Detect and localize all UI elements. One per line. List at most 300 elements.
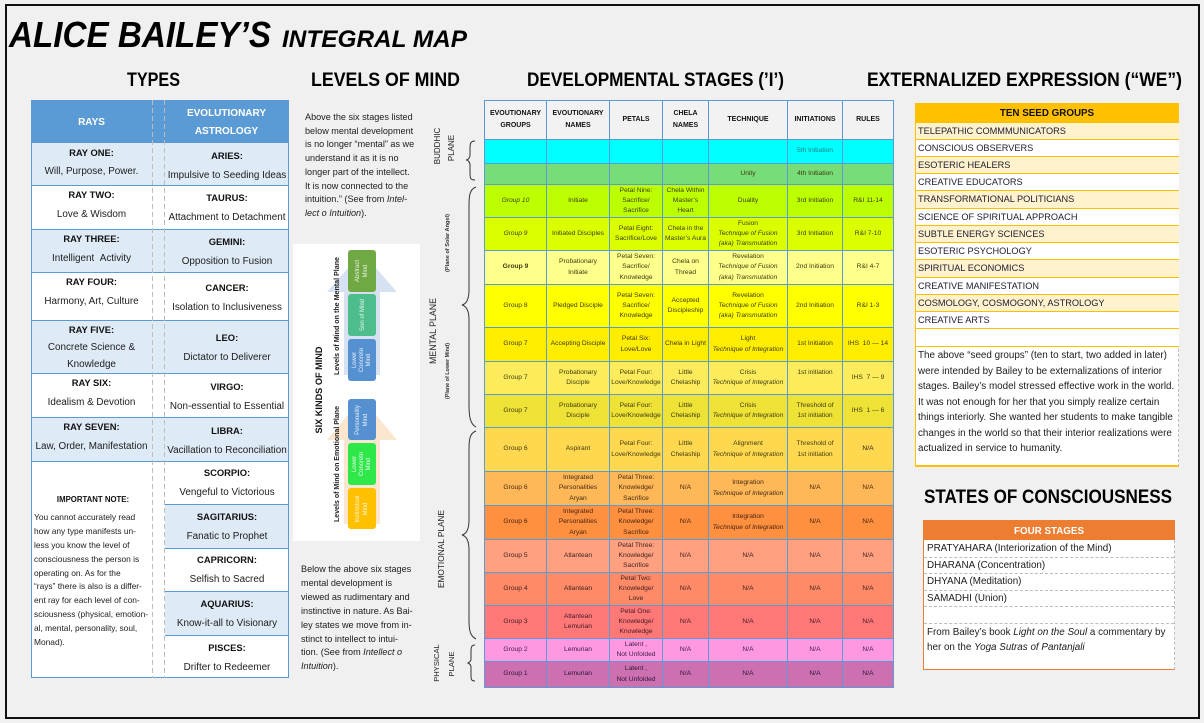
four stages list: PRATYAHARA (Interiorization of the Mind) — [927, 543, 1112, 554]
capricorn: CAPRICORN: — [197, 554, 257, 564]
table: developmental stages: N/A — [862, 484, 874, 491]
table: developmental stages: INITIATIONS — [794, 116, 836, 123]
table: developmental stages: Discipleship — [668, 307, 703, 314]
ray five: Concrete Science & — [48, 342, 135, 353]
text block: above the six stages: It is now connected to the — [305, 181, 408, 191]
table: developmental stages: N/A — [680, 484, 691, 491]
table: developmental stages: R&I 11-14 — [853, 197, 883, 204]
table: developmental stages: RULES — [856, 116, 880, 123]
seed panel background — [915, 103, 1179, 467]
virgo — [170, 381, 284, 412]
table: developmental stages: Duality — [738, 197, 758, 204]
box: lower concrete mind, mental: Mind — [366, 353, 372, 367]
table: developmental stages: 3rd Initiation — [797, 230, 833, 237]
table: developmental stages: Lemurian — [564, 623, 592, 630]
table: developmental stages: Chelaship — [671, 450, 700, 458]
label: buddhic plane — [433, 128, 456, 164]
table: developmental stages: N/A — [680, 518, 691, 525]
table: developmental stages: Not Unfolded — [616, 676, 656, 682]
box: instinctual mind: Mind — [363, 502, 369, 516]
table: developmental stages: Petal Four: — [620, 402, 652, 409]
table: developmental stages: Accepted — [672, 297, 699, 304]
brace: mental plane — [462, 187, 476, 427]
brace: buddhic plane — [466, 141, 475, 180]
table: developmental stages: Chela Within — [667, 187, 704, 194]
diagram: six kinds of mind — [313, 250, 397, 529]
table: developmental stages: NAMES — [565, 122, 591, 129]
table: developmental stages: Technique of Fusion — [718, 302, 778, 309]
box: abstract mind: Abstract — [355, 260, 361, 282]
ray three — [52, 233, 131, 264]
ray six — [48, 377, 135, 408]
table: developmental stages: Chelaship — [671, 412, 700, 419]
table: developmental stages: Petal Nine: — [620, 187, 652, 194]
table: developmental stages: Probationary — [559, 369, 597, 376]
table: developmental stages: Accepting Disciple — [551, 340, 605, 347]
text: CREATIVE MANIFESTATION — [918, 281, 1039, 291]
table: developmental stages: IHS 1 — 6 — [852, 407, 884, 414]
table: developmental stages: Initiate — [568, 197, 588, 204]
ray seven — [36, 421, 147, 452]
table: developmental stages: Petal Three: — [618, 542, 654, 549]
scorpio — [179, 466, 275, 498]
table: developmental stages: Chela on — [672, 258, 699, 265]
text block: above the six stages: lect o Intuition). — [305, 208, 367, 218]
label: levels of mind on the mental plane: Levels of Mind on the Mental Plane — [332, 257, 341, 375]
table: developmental stages: N/A — [809, 585, 821, 592]
important note: how any type manifests un- — [34, 526, 136, 536]
label: physical plane: PLANE — [447, 652, 456, 676]
four stages list: SAMADHI (Union) — [927, 592, 1007, 604]
panel: four stages background — [923, 520, 1175, 670]
ray seven: RAY SEVEN: — [63, 421, 120, 432]
label: emotional plane: EMOTIONAL PLANE — [436, 510, 446, 588]
four stages list: her on the Yoga Sutras of Pantanjali — [927, 642, 1085, 652]
four stages list: From Bailey’s book Light on the Soul a commentary by — [927, 627, 1165, 638]
gemini: Opposition to Fusion — [182, 256, 272, 267]
seed groups header — [915, 103, 1179, 123]
title — [8, 14, 468, 55]
table: developmental stages: (aka) Transmutation — [719, 240, 777, 247]
text block: above the six stages: is no longer “mental” as we — [305, 139, 414, 149]
table: developmental stages: 1st initiation — [797, 412, 833, 419]
table: developmental stages: Sacrifice — [623, 529, 649, 536]
seed groups explanation: It was not enough for her that you simply realize certain — [918, 396, 1159, 408]
table: developmental stages: EVOUTIONARY — [552, 110, 604, 117]
table: developmental stages: Disciple — [566, 379, 590, 386]
table: developmental stages: R&I 4-7 — [857, 263, 879, 270]
cancer — [172, 282, 282, 313]
text block: below the six stages: tion. (See from Intellect o — [301, 647, 402, 657]
seed groups explanation: things interiorly. She wanted her students to make tangible — [918, 412, 1173, 423]
table: developmental stages: Sacrifice/ — [622, 302, 650, 309]
label: levels of mind on emotional plane: Levels of Mind on Emotional Plane — [332, 406, 341, 522]
table: developmental stages: Group 6 — [503, 445, 528, 452]
title: ALICE BAILEY’S — [8, 14, 271, 55]
brace: physical plane — [468, 645, 475, 681]
box: lower concrete mind, emotional — [348, 443, 376, 485]
table: developmental stages: Knowledge/ — [619, 518, 653, 525]
table: developmental stages: PETALS — [622, 116, 650, 123]
table: developmental stages: Technique of Integration — [713, 379, 783, 386]
table: developmental stages: R&I 7-10 — [855, 230, 881, 237]
libra — [167, 425, 287, 456]
heading: externalized expression: EXTERNALIZED EXPRESSION (“WE”) — [867, 70, 1182, 91]
ray four — [44, 276, 139, 306]
heading: states of consciousness: STATES OF CONSCIOUSNESS — [924, 487, 1172, 508]
label: physical plane — [432, 644, 456, 682]
table: developmental stages: NAMES — [673, 122, 698, 129]
ray two: RAY TWO: — [68, 189, 115, 200]
table: developmental stages: N/A — [862, 670, 874, 677]
ray six: Idealism & Devotion — [48, 396, 135, 408]
four stages list: DHARANA (Concentration) — [927, 560, 1045, 570]
table: developmental stages: Personalities — [559, 518, 597, 525]
box: abstract mind — [348, 250, 376, 292]
table: developmental stages: Pledged Disciple — [553, 302, 603, 309]
table: developmental stages: N/A — [809, 670, 821, 677]
text block: below the six stages: Intuition). — [301, 661, 338, 671]
table: developmental stages: Little — [678, 440, 693, 447]
ray five: RAY FIVE: — [69, 324, 114, 335]
table: developmental stages: Sacrifice/ — [622, 197, 650, 204]
gemini: GEMINI: — [209, 236, 245, 247]
table: developmental stages: Love/Love — [621, 346, 651, 352]
table: developmental stages: Disciple — [566, 412, 590, 419]
important note: al, mental, personality, soul, — [34, 623, 137, 633]
table: developmental stages: Latent , — [625, 641, 647, 648]
heading: levels of mind: LEVELS OF MIND — [311, 70, 460, 91]
table: developmental stages: N/A — [809, 618, 821, 625]
box: lower concrete mind, mental: Concrete — [359, 347, 365, 372]
four stages list: DHYANA (Meditation) — [927, 576, 1021, 587]
table: developmental stages: Knowledge/ — [619, 585, 653, 592]
pisces — [184, 642, 270, 672]
text: CREATIVE EDUCATORS — [918, 177, 1023, 187]
ray three: RAY THREE: — [63, 233, 120, 244]
table: developmental stages: Knowledge — [619, 274, 653, 281]
table: developmental stages: Light — [741, 335, 755, 342]
label: physical plane: PHYSICAL — [432, 644, 441, 682]
table: developmental stages: Sacrifice — [623, 495, 649, 502]
table: developmental stages: Petal Seven: — [617, 292, 655, 299]
table: developmental stages: Integration — [732, 513, 764, 520]
table: developmental stages: Atlantean — [564, 585, 592, 592]
table: developmental stages: Technique of Integration — [713, 412, 783, 419]
table: developmental stages: Group 1 — [503, 670, 528, 677]
table: developmental stages: IHS 10 — 14 — [848, 340, 888, 347]
text block: below the six stages — [301, 564, 413, 671]
box: lower concrete mind, mental: Lower — [352, 352, 358, 368]
scorpio: Vengeful to Victorious — [179, 486, 275, 498]
table: developmental stages: Knowledge — [619, 628, 653, 635]
table: developmental stages: Alignment — [733, 440, 763, 447]
table: developmental stages: N/A — [809, 552, 821, 559]
table: developmental stages: Love/Knowledge — [611, 412, 661, 419]
heading: types: TYPES — [127, 70, 180, 91]
text block: above the six stages: below mental development — [305, 126, 413, 136]
table: developmental stages: Petal Four: — [620, 369, 652, 376]
ray one row — [31, 143, 289, 185]
table: developmental stages: CHELA — [673, 110, 698, 117]
ray five: Knowledge — [67, 359, 116, 370]
table: developmental stages: N/A — [742, 646, 754, 653]
important note: IMPORTANT NOTE: — [57, 495, 129, 504]
important note: consciousness the person is — [34, 554, 139, 564]
text: SCIENCE OF SPIRITUAL APPROACH — [918, 212, 1077, 222]
seed groups explanation: stages. Bailey’s model stressed effective work in the world. — [918, 381, 1174, 392]
table: developmental stages: N/A — [680, 552, 691, 559]
table: developmental stages: Aryan — [569, 495, 587, 502]
table: developmental stages: Master’s — [673, 197, 698, 204]
table: developmental stages: Probationary — [559, 402, 597, 409]
table: developmental stages: Group 10 — [502, 197, 529, 204]
table: developmental stages: Group 6 — [503, 484, 528, 491]
table: developmental stages: Integration — [732, 479, 764, 486]
pisces: Drifter to Redeemer — [184, 662, 270, 672]
table: developmental stages: Group 9 — [504, 230, 527, 237]
box: son of mind: Son of Mind — [360, 299, 366, 331]
table: developmental stages: Fusion — [738, 220, 758, 227]
aries: ARIES: — [211, 150, 243, 161]
leo — [183, 332, 271, 362]
aquarius: AQUARIUS: — [200, 598, 254, 609]
cancer: Isolation to Inclusiveness — [172, 302, 282, 313]
virgo: Non-essential to Essential — [170, 401, 284, 412]
table: developmental stages — [484, 100, 894, 688]
table: developmental stages: N/A — [862, 585, 874, 592]
arrow: mental plane — [327, 252, 397, 375]
brace: emotional plane — [462, 431, 476, 639]
table: developmental stages: Technique of Integration — [713, 490, 783, 496]
table: developmental stages: Aryan — [569, 529, 587, 536]
table: developmental stages: Knowledge/ — [619, 618, 653, 625]
table: developmental stages: Petal Four: — [620, 440, 652, 447]
panel: ten seed groups — [915, 103, 1179, 670]
ray five row — [31, 320, 289, 373]
virgo: VIRGO: — [210, 381, 244, 392]
box: lower concrete mind, emotional: Lower — [352, 456, 358, 472]
label: plane of solar angel: (Plane of Solar Angel) — [445, 214, 451, 272]
scorpio: SCORPIO: — [204, 466, 250, 478]
table: developmental stages: TECHNIQUE — [727, 116, 769, 123]
table: developmental stages: Sacrifice/Love — [615, 235, 657, 242]
table: developmental stages: Chela in the — [668, 225, 703, 232]
four stages header: FOUR STAGES — [1014, 526, 1084, 537]
box: lower concrete mind, emotional: Concrete — [359, 451, 365, 476]
capricorn — [190, 554, 264, 584]
table: developmental stages: Petal Seven: — [617, 253, 655, 260]
table: developmental stages: EVOUTIONARY — [490, 110, 541, 117]
table: developmental stages: 2nd Initiation — [796, 263, 834, 270]
box: lower concrete mind, mental — [348, 339, 376, 381]
table: developmental stages: Love/Knowledge — [611, 450, 661, 458]
box: abstract mind: Mind — [363, 264, 369, 278]
table: developmental stages: Revelation — [732, 292, 764, 299]
table: developmental stages: N/A — [862, 445, 874, 452]
table: developmental stages: GROUPS — [500, 122, 531, 129]
pisces: PISCES: — [208, 642, 246, 652]
label: buddhic plane: BUDDHIC — [433, 128, 442, 164]
table: developmental stages: Master’s Aura — [665, 235, 706, 242]
table: developmental stages: 1st Initiation — [797, 340, 833, 347]
table: developmental stages: Technique of Fusion — [718, 263, 778, 270]
table: developmental stages: N/A — [680, 646, 691, 653]
cancer: CANCER: — [205, 282, 249, 293]
table: developmental stages: Lemurian — [564, 670, 592, 677]
taurus: TAURUS: — [206, 192, 248, 202]
table: developmental stages: Sacrifice/ — [622, 263, 650, 270]
ray one: Will, Purpose, Power. — [45, 166, 138, 177]
text block: below the six stages: instinctive in nature. As Bai- — [301, 606, 413, 616]
table: developmental stages: Technique of Integration — [713, 450, 783, 458]
table: developmental stages: Petal Three: — [618, 508, 654, 515]
important note: less you know the level of — [34, 540, 129, 550]
text block: above the six stages: Above the six stages listed — [305, 112, 413, 122]
table: developmental stages: Chela in Light — [665, 340, 706, 347]
diagram title: SIX KINDS OF MIND — [313, 346, 324, 434]
table: developmental stages: Group 7 — [503, 374, 528, 381]
ray three: Intelligent Activity — [52, 252, 131, 264]
ray seven: Law, Order, Manifestation — [36, 440, 147, 452]
aquarius row — [165, 591, 289, 635]
ray five — [48, 324, 135, 370]
table: developmental stages: Technique of Integration — [713, 346, 783, 352]
box: instinctual mind: Instinctual — [355, 495, 361, 523]
text block: above the six stages: longer part of the intellect. — [305, 167, 410, 177]
seed groups explanation: The above “seed groups” (ten to start, two added in later) — [918, 350, 1167, 361]
table: developmental stages: Lemurian — [564, 646, 592, 653]
text block: below the six stages: viewed as rudimentary and — [301, 592, 410, 602]
table: developmental stages: N/A — [862, 618, 874, 625]
table header: rays and evolutionary astrology — [31, 100, 289, 143]
table: developmental stages: Group 9 — [503, 263, 528, 270]
table: developmental stages: 1st initiation — [797, 450, 833, 458]
table: developmental stages: Group 8 — [503, 302, 528, 309]
table: developmental stages: N/A — [809, 518, 821, 525]
seed groups explanation: were intended by Bailey to be externalizations of interior — [918, 366, 1162, 376]
table: developmental stages: 2nd Initiation — [796, 302, 834, 309]
table: developmental stages: Petal One: — [620, 608, 652, 615]
seed groups header: TEN SEED GROUPS — [1000, 108, 1094, 119]
table: developmental stages: Group 7 — [503, 407, 528, 414]
table: developmental stages: Knowledge/ — [619, 484, 653, 491]
table: developmental stages: Group 3 — [503, 618, 528, 625]
table: developmental stages: R&I 1-3 — [857, 302, 879, 309]
table: developmental stages: Probationary — [559, 258, 597, 265]
table: developmental stages: Knowledge — [619, 312, 653, 319]
table header: rays and evolutionary astrology: RAYS — [78, 117, 105, 128]
table: developmental stages: N/A — [809, 484, 821, 491]
table: developmental stages: Threshold of — [796, 440, 834, 447]
table: developmental stages: Sacrifice — [623, 207, 649, 214]
text block: below the six stages: ley states we move from in- — [301, 620, 412, 630]
sagittarius: SAGITARIUS: — [197, 511, 257, 522]
table: developmental stages: Thread — [675, 268, 696, 276]
important note: sciousness (physical, emotion- — [34, 609, 148, 619]
table: developmental stages: Atlantean — [564, 613, 592, 620]
table: developmental stages: Technique of Integration — [713, 524, 783, 530]
important note: You cannot accurately read — [34, 512, 135, 522]
table: developmental stages: Group 6 — [503, 518, 528, 525]
aries — [168, 150, 286, 181]
table: developmental stages: N/A — [742, 618, 754, 625]
sagittarius: Fanatic to Prophet — [187, 531, 267, 542]
box: personality mind: Personality — [355, 405, 361, 435]
four stages header — [923, 520, 1175, 540]
seed groups explanation: changes in the world so that their interior realizations were — [918, 428, 1172, 438]
table: developmental stages: Crisis — [740, 369, 756, 376]
table: developmental stages: Threshold of — [796, 402, 834, 409]
taurus: Attachment to Detachment — [169, 212, 285, 222]
libra: Vacillation to Reconciliation — [167, 445, 287, 456]
text: CONSCIOUS OBSERVERS — [918, 143, 1033, 153]
table header: rays and evolutionary astrology: ASTROLOGY — [195, 126, 258, 137]
four stages list — [924, 543, 1174, 652]
ray six: RAY SIX: — [72, 377, 111, 388]
box: personality mind: Mind — [363, 413, 369, 427]
leo: Dictator to Deliverer — [183, 352, 271, 362]
table: developmental stages: N/A — [680, 585, 691, 592]
table: developmental stages: Not Unfolded — [616, 651, 656, 658]
table: developmental stages: Crisis — [740, 402, 756, 409]
text: TRANSFORMATIONAL POLITICIANS — [918, 194, 1074, 204]
text block: above the six stages — [305, 112, 414, 218]
panel: six kinds of mind diagram — [293, 244, 420, 541]
taurus — [168, 192, 286, 222]
table: developmental stages: Atlantean — [564, 552, 592, 559]
text: ESOTERIC PSYCHOLOGY — [918, 246, 1032, 256]
table: developmental stages: N/A — [862, 552, 874, 559]
table: developmental stages: Group 2 — [503, 646, 528, 653]
box: instinctual mind — [348, 488, 376, 529]
table: developmental stages: Initiate — [568, 268, 588, 276]
table: developmental stages: Group 7 — [503, 340, 528, 347]
table: developmental stages: 4th Initiation — [797, 170, 833, 177]
table: developmental stages: Initiated Disciples — [552, 230, 604, 237]
table: developmental stages: Integrated — [563, 508, 593, 515]
important note: operating on. As for the — [34, 568, 121, 578]
table: developmental stages: IHS 7 — 9 — [852, 374, 884, 381]
text: SUBTLE ENERGY SCIENCES — [918, 229, 1044, 239]
heading: developmental stages: DEVELOPMENTAL STAGES (’I’) — [527, 70, 784, 91]
box: son of mind — [348, 294, 376, 336]
table header: rays and evolutionary astrology: EVOLUTIONARY — [187, 108, 266, 119]
leo: LEO: — [216, 332, 238, 342]
text: COSMOLOGY, COSMOGONY, ASTROLOGY — [918, 298, 1105, 308]
ray two: Love & Wisdom — [57, 208, 126, 220]
table: developmental stages: Technique of Fusion — [718, 230, 778, 237]
table: developmental stages: N/A — [680, 670, 691, 677]
table: developmental stages: Integrated — [563, 474, 593, 481]
table: developmental stages: Petal Eight: — [619, 225, 653, 232]
table: developmental stages: N/A — [742, 585, 754, 592]
table: developmental stages: 1st initiation — [797, 369, 833, 376]
arrow: emotional plane — [327, 398, 397, 524]
table: developmental stages: Unity — [740, 170, 756, 177]
seed groups explanation: actualized in service to humanity. — [918, 443, 1062, 454]
panel: types table — [31, 100, 289, 678]
box: personality mind — [348, 399, 376, 440]
ray four: Harmony, Art, Culture — [44, 296, 139, 306]
table: developmental stages: Love/Knowledge — [611, 379, 661, 386]
table: developmental stages: 5th Initiation — [797, 147, 833, 154]
aquarius — [177, 598, 277, 629]
table: developmental stages: Revelation — [732, 253, 764, 260]
text block: above the six stages: understand it as it is no — [305, 153, 399, 163]
label: plane of lower mind: (Plane of Lower Mind) — [445, 343, 451, 399]
title: INTEGRAL MAP — [282, 26, 468, 53]
